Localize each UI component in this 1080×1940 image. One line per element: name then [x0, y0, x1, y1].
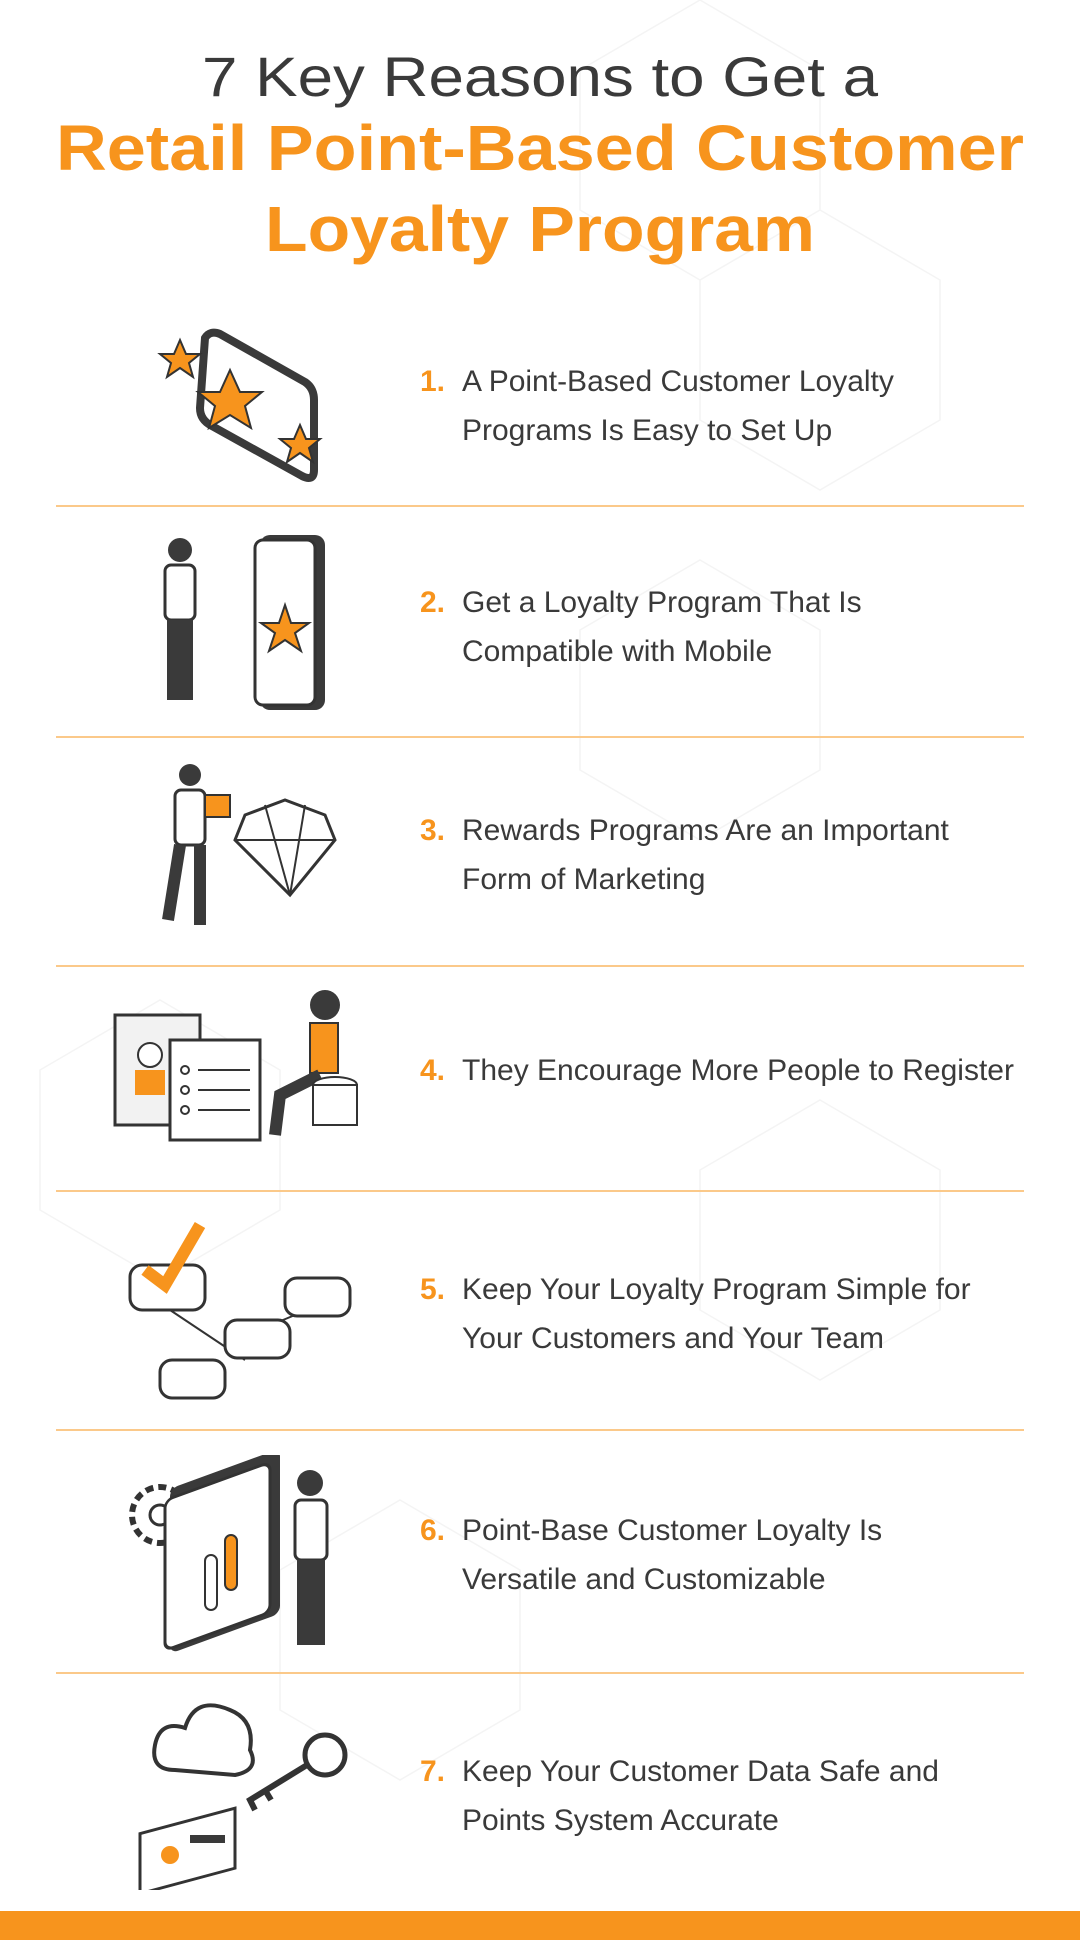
- item 6 text: 6.: [420, 1514, 445, 1547]
- item 4 text: They Encourage More People to Register: [462, 1054, 1014, 1087]
- item 3 text: 3.: [420, 814, 445, 847]
- item 3 text: Form of Marketing: [462, 863, 705, 896]
- title: Retail Point-Based Customer: [56, 112, 1024, 184]
- item 7 text: Keep Your Customer Data Safe and: [462, 1755, 939, 1788]
- icon: person with diamond: [162, 764, 337, 925]
- item 2 text: Compatible with Mobile: [462, 635, 772, 668]
- item 7 text: Points System Accurate: [462, 1804, 779, 1837]
- item 5 text: Your Customers and Your Team: [462, 1322, 884, 1355]
- item 6 text: Point-Base Customer Loyalty Is: [462, 1514, 882, 1547]
- item 5 text: 5.: [420, 1273, 445, 1306]
- item 4 text: 4.: [420, 1054, 445, 1087]
- item 2 text: [420, 586, 862, 668]
- footer bar: [0, 1911, 1080, 1940]
- item 5 text: [420, 1273, 971, 1355]
- item 3 text: [420, 814, 949, 896]
- item 7 text: 7.: [420, 1755, 445, 1788]
- icon: stars board: [157, 328, 323, 482]
- icon: settings panel and person: [129, 1455, 328, 1652]
- item 6 text: [420, 1514, 882, 1596]
- icon: register screens and person: [114, 990, 358, 1142]
- icon: person with phone: [164, 535, 325, 710]
- item 6 text: Versatile and Customizable: [462, 1563, 826, 1596]
- item 5 text: Keep Your Loyalty Program Simple for: [462, 1273, 971, 1306]
- item 2 text: Get a Loyalty Program That Is: [462, 586, 862, 619]
- icon: cloud key card: [138, 1703, 348, 1890]
- item 1 text: [420, 365, 894, 447]
- title: [56, 45, 1024, 265]
- item 3 text: Rewards Programs Are an Important: [462, 814, 949, 847]
- title: 7 Key Reasons to Get a: [202, 45, 879, 108]
- item 1 text: A Point-Based Customer Loyalty: [462, 365, 894, 398]
- title: Loyalty Program: [265, 193, 815, 265]
- icon: flowchart check: [128, 1222, 352, 1400]
- item 2 text: 2.: [420, 586, 445, 619]
- item 1 text: 1.: [420, 365, 445, 398]
- item 1 text: Programs Is Easy to Set Up: [462, 414, 832, 447]
- item 7 text: [420, 1755, 939, 1837]
